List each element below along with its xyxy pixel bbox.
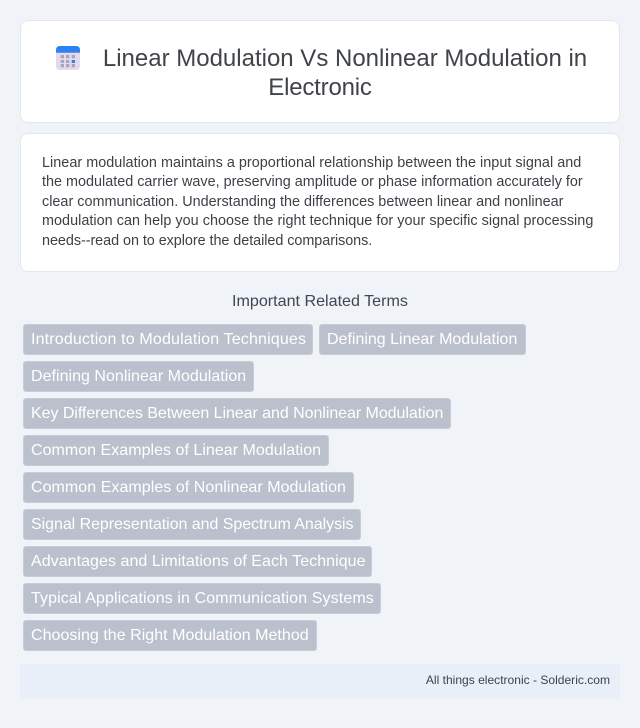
tag: Key Differences Between Linear and Nonlinear Modulation bbox=[31, 405, 443, 422]
tag bbox=[23, 509, 361, 540]
description text: the modulated carrier wave, preserving amplitude or phase information accurately for bbox=[42, 174, 583, 190]
tag bbox=[23, 472, 354, 503]
tag bbox=[23, 583, 381, 614]
description text: Linear modulation maintains a proportional relationship between the input signal and bbox=[42, 155, 581, 171]
icon: calendar bbox=[56, 46, 80, 70]
tag bbox=[23, 620, 317, 651]
title: Electronic bbox=[268, 74, 372, 101]
footer bar bbox=[20, 664, 620, 698]
tag bbox=[23, 324, 313, 355]
header card bbox=[20, 20, 620, 123]
description card bbox=[20, 133, 620, 272]
tag bbox=[23, 435, 329, 466]
tag bbox=[23, 361, 254, 392]
tag: Introduction to Modulation Techniques bbox=[31, 331, 306, 348]
tag: Choosing the Right Modulation Method bbox=[31, 627, 309, 644]
tag bbox=[319, 324, 526, 355]
tag bbox=[23, 398, 451, 429]
description text bbox=[42, 155, 593, 249]
tag: Signal Representation and Spectrum Analysis bbox=[31, 516, 353, 533]
tag: Common Examples of Nonlinear Modulation bbox=[31, 479, 346, 496]
section heading: Important Related Terms bbox=[232, 292, 408, 310]
tag: Defining Linear Modulation bbox=[327, 331, 517, 348]
tag: Common Examples of Linear Modulation bbox=[31, 442, 321, 459]
title bbox=[103, 45, 587, 101]
description text: clear communication. Understanding the differences between linear and nonlinear bbox=[42, 194, 563, 210]
tag: Typical Applications in Communication Systems bbox=[31, 590, 374, 607]
title: Linear Modulation Vs Nonlinear Modulation in bbox=[103, 45, 587, 72]
tag: Advantages and Limitations of Each Technique bbox=[31, 553, 366, 570]
footer text: All things electronic - Solderic.com bbox=[426, 673, 610, 687]
tag bbox=[23, 546, 372, 577]
description text: needs--read on to explore the detailed comparisons. bbox=[42, 233, 372, 249]
tag: Defining Nonlinear Modulation bbox=[31, 368, 246, 385]
description text: modulation can help you choose the right technique for your specific signal processing bbox=[42, 213, 593, 229]
